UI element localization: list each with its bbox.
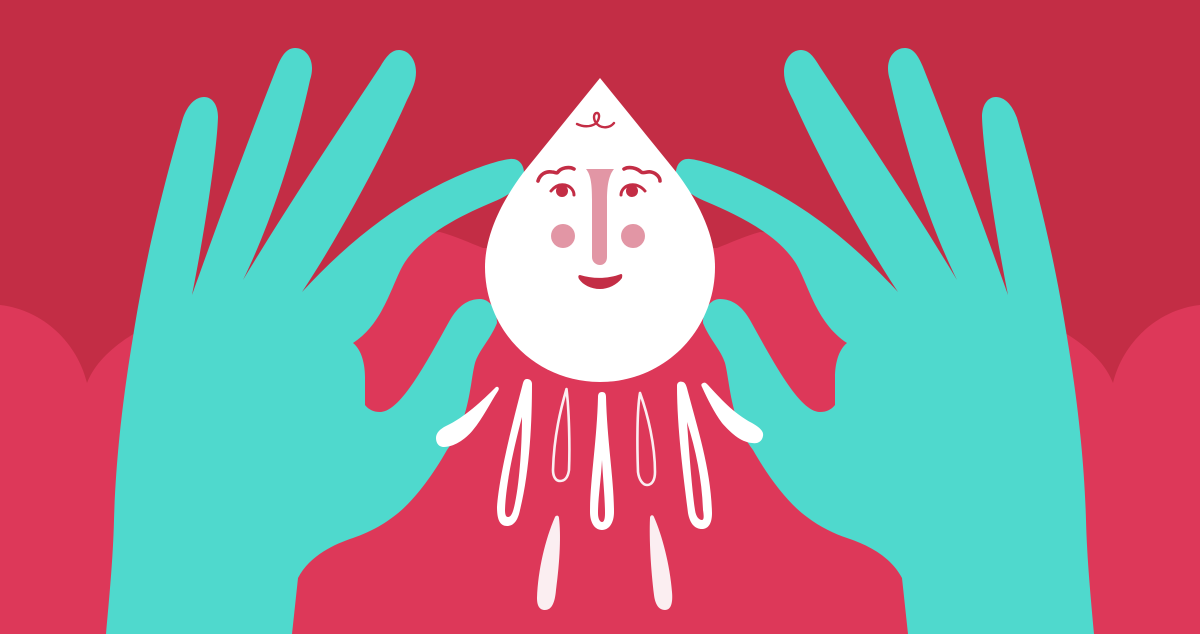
falling droplets [436,379,763,610]
thin outlined drop 2 [553,389,569,481]
right cheek [621,224,645,248]
pale bottom-left drop [537,516,560,610]
left hand [106,48,524,634]
right eyebrow [624,168,660,181]
outlined centre drop 3 [590,392,614,530]
background: lighter red scalloped hills [0,232,1200,634]
water drop with face [485,78,715,382]
left cheek [551,224,575,248]
thin outlined drop 4 [637,393,655,485]
outlined drop 5 [677,382,712,529]
left eyebrow [538,168,574,181]
right white drip [701,383,763,443]
outlined drop 1 [497,379,532,526]
right eye [621,185,645,197]
right hand [676,48,1094,634]
nose [586,169,614,265]
pale bottom-right drop [650,515,672,610]
mouth [578,274,622,289]
left eye [551,185,574,197]
forehead curl [577,113,614,127]
drop body [485,78,715,382]
left white drip [436,387,499,447]
